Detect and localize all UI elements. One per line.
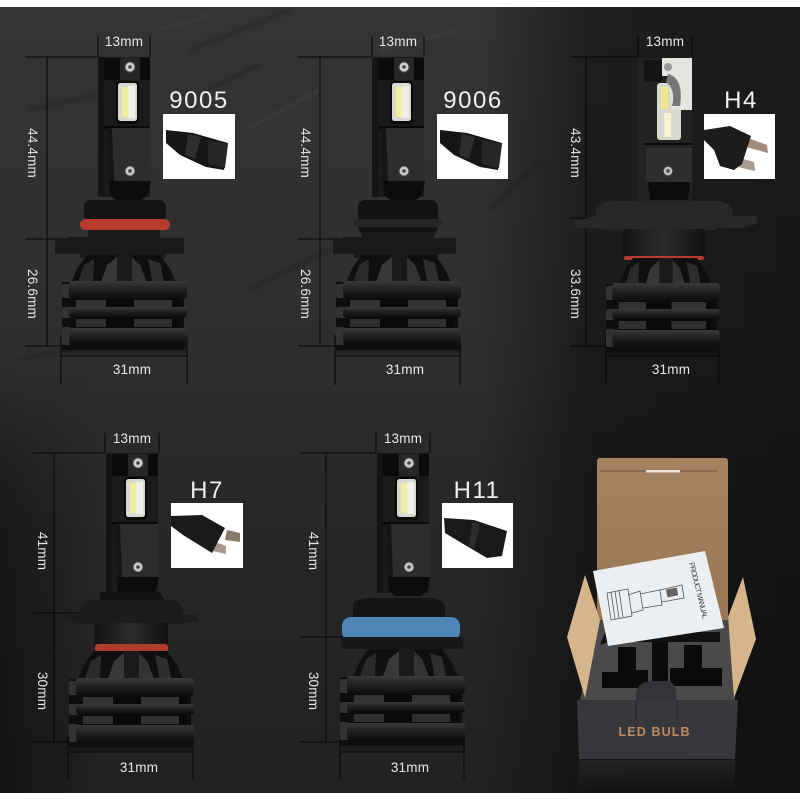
- dim 31mm: 31mm: [391, 760, 429, 775]
- right flap: [728, 577, 756, 698]
- dim 31mm: 31mm: [113, 362, 151, 377]
- fins H7: [77, 651, 184, 681]
- heat sink 9006: [336, 281, 461, 356]
- stem 9006: [372, 57, 425, 200]
- connector photo H4: [704, 114, 775, 179]
- model label: H7: [190, 477, 224, 504]
- stem 9005: [98, 57, 151, 200]
- model label: 9006: [443, 87, 503, 114]
- foam cut-outs: [602, 640, 722, 690]
- dimension lines H4: [570, 36, 719, 385]
- stem H7: [106, 453, 159, 596]
- socket H7: [100, 592, 164, 600]
- bulb H7: [33, 431, 243, 780]
- bulb 9006: [298, 34, 508, 385]
- dim 30mm: 30mm: [306, 672, 321, 710]
- lid crease: [600, 470, 717, 472]
- red ring H7: [95, 644, 168, 652]
- model label: H4: [724, 87, 758, 114]
- heat sink H7: [69, 678, 194, 753]
- socket H11: [353, 598, 445, 620]
- dim 31mm: 31mm: [120, 760, 158, 775]
- stem H11: [377, 453, 430, 596]
- model label: 9005: [169, 87, 229, 114]
- model label: H11: [454, 477, 500, 504]
- dimension lines H11: [300, 433, 464, 780]
- reflection: [579, 760, 735, 793]
- dimension lines 9005: [25, 36, 187, 385]
- dim 44.4mm: 44.4mm: [298, 128, 313, 178]
- flange H4: [575, 201, 757, 230]
- flange 9006: [333, 232, 456, 258]
- dim 33.6mm: 33.6mm: [568, 269, 583, 319]
- heat sink H4: [606, 283, 720, 358]
- manual: [593, 551, 724, 646]
- dim 41mm: 41mm: [35, 532, 50, 570]
- dim 30mm: 30mm: [35, 672, 50, 710]
- neck H4: [623, 229, 705, 257]
- heat sink 9005: [62, 281, 187, 356]
- dim 13mm: 13mm: [379, 34, 417, 49]
- dimension lines 9006: [298, 36, 460, 385]
- box front: [577, 700, 738, 759]
- connector photo 9005: [163, 114, 235, 179]
- connector photo H11: [442, 503, 513, 568]
- box label: LED BULB: [618, 725, 690, 739]
- flange H7: [65, 600, 198, 624]
- fins 9006: [345, 255, 452, 285]
- connector photo 9006: [437, 114, 508, 179]
- foam insert: [580, 620, 735, 700]
- black ring 9006: [354, 219, 442, 227]
- manual title: PRODUCT MANUAL: [687, 561, 710, 620]
- red o-ring 9005: [80, 219, 170, 230]
- dim 13mm: 13mm: [384, 431, 422, 446]
- dim 26.6mm: 26.6mm: [298, 269, 313, 319]
- flange 9005: [55, 230, 184, 258]
- red ring H4: [624, 256, 704, 260]
- neck H7: [94, 623, 168, 645]
- dim 13mm: 13mm: [113, 431, 151, 446]
- fins H4: [618, 258, 712, 288]
- dim 44.4mm: 44.4mm: [25, 128, 40, 178]
- connector photo H7: [171, 503, 243, 568]
- flange H11: [341, 637, 463, 649]
- dim 31mm: 31mm: [386, 362, 424, 377]
- bulb H4: [568, 34, 775, 385]
- socket 9006: [358, 200, 438, 234]
- fins 9005: [70, 255, 177, 285]
- heat sink H11: [340, 676, 465, 751]
- fins H11: [352, 649, 459, 679]
- dim 41mm: 41mm: [306, 532, 321, 570]
- socket 9005: [84, 200, 166, 222]
- box lid: [597, 458, 728, 620]
- box tab: [636, 681, 676, 700]
- blue seal H11: [342, 617, 460, 641]
- dim 13mm: 13mm: [646, 34, 684, 49]
- dim 26.6mm: 26.6mm: [25, 269, 40, 319]
- dimension lines H7: [33, 433, 193, 780]
- manual bulb diagram: [607, 585, 684, 620]
- dim 31mm: 31mm: [652, 362, 690, 377]
- left flap: [567, 575, 600, 698]
- bulb 9005: [25, 34, 235, 385]
- dim 13mm: 13mm: [105, 34, 143, 49]
- stem H4: [638, 58, 692, 203]
- product box: [567, 458, 756, 793]
- dim 43.4mm: 43.4mm: [568, 128, 583, 178]
- bulb H11: [300, 431, 513, 780]
